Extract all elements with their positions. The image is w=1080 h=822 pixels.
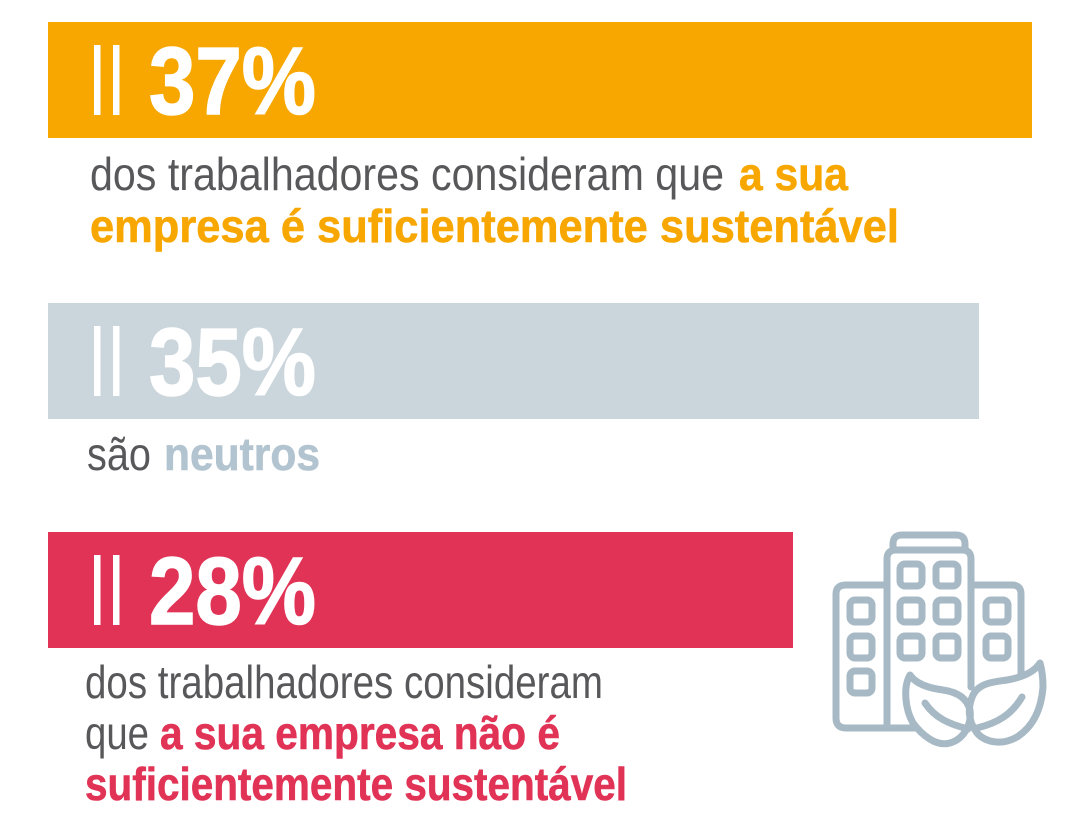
bar: 35% bbox=[48, 303, 979, 419]
value: 28%: 28% bbox=[149, 538, 316, 645]
text: line 1: dos trabalhadores consideram que bbox=[90, 148, 724, 200]
text: que: que bbox=[85, 707, 149, 759]
bar: 28% bbox=[48, 532, 793, 648]
central tower bbox=[887, 550, 971, 728]
panel: 37% sufficiently sustainable bbox=[48, 22, 1032, 252]
tower top bbox=[893, 535, 965, 548]
bar: 37% bbox=[48, 22, 1032, 138]
panel: 28% not sufficiently sustainable bbox=[48, 532, 793, 810]
panel: 35% neutral bbox=[48, 303, 979, 480]
highlight: a sua: a sua bbox=[739, 148, 848, 200]
right leaf bbox=[969, 663, 1043, 742]
right wing bbox=[973, 585, 1021, 674]
windows bbox=[900, 564, 922, 586]
icon: buildings with leaves bbox=[836, 535, 1043, 744]
value: 37%: 37% bbox=[149, 28, 316, 135]
highlight: neutros: neutros bbox=[164, 428, 320, 480]
double bar mark bbox=[94, 326, 120, 396]
double bar mark bbox=[94, 45, 120, 115]
left wing bbox=[836, 585, 914, 728]
text: line 1: dos trabalhadores consideram bbox=[85, 656, 603, 708]
leaf veins bbox=[925, 703, 968, 729]
double bar mark bbox=[94, 555, 120, 625]
text: são: são bbox=[87, 428, 151, 480]
highlight: line 2: a sua empresa não é bbox=[160, 707, 560, 759]
value: 35%: 35% bbox=[149, 309, 316, 416]
left leaf bbox=[906, 675, 970, 744]
highlight: line 2: empresa é suficientemente sustentável bbox=[90, 200, 899, 252]
highlight: line 3: suficientemente sustentável bbox=[85, 758, 627, 810]
